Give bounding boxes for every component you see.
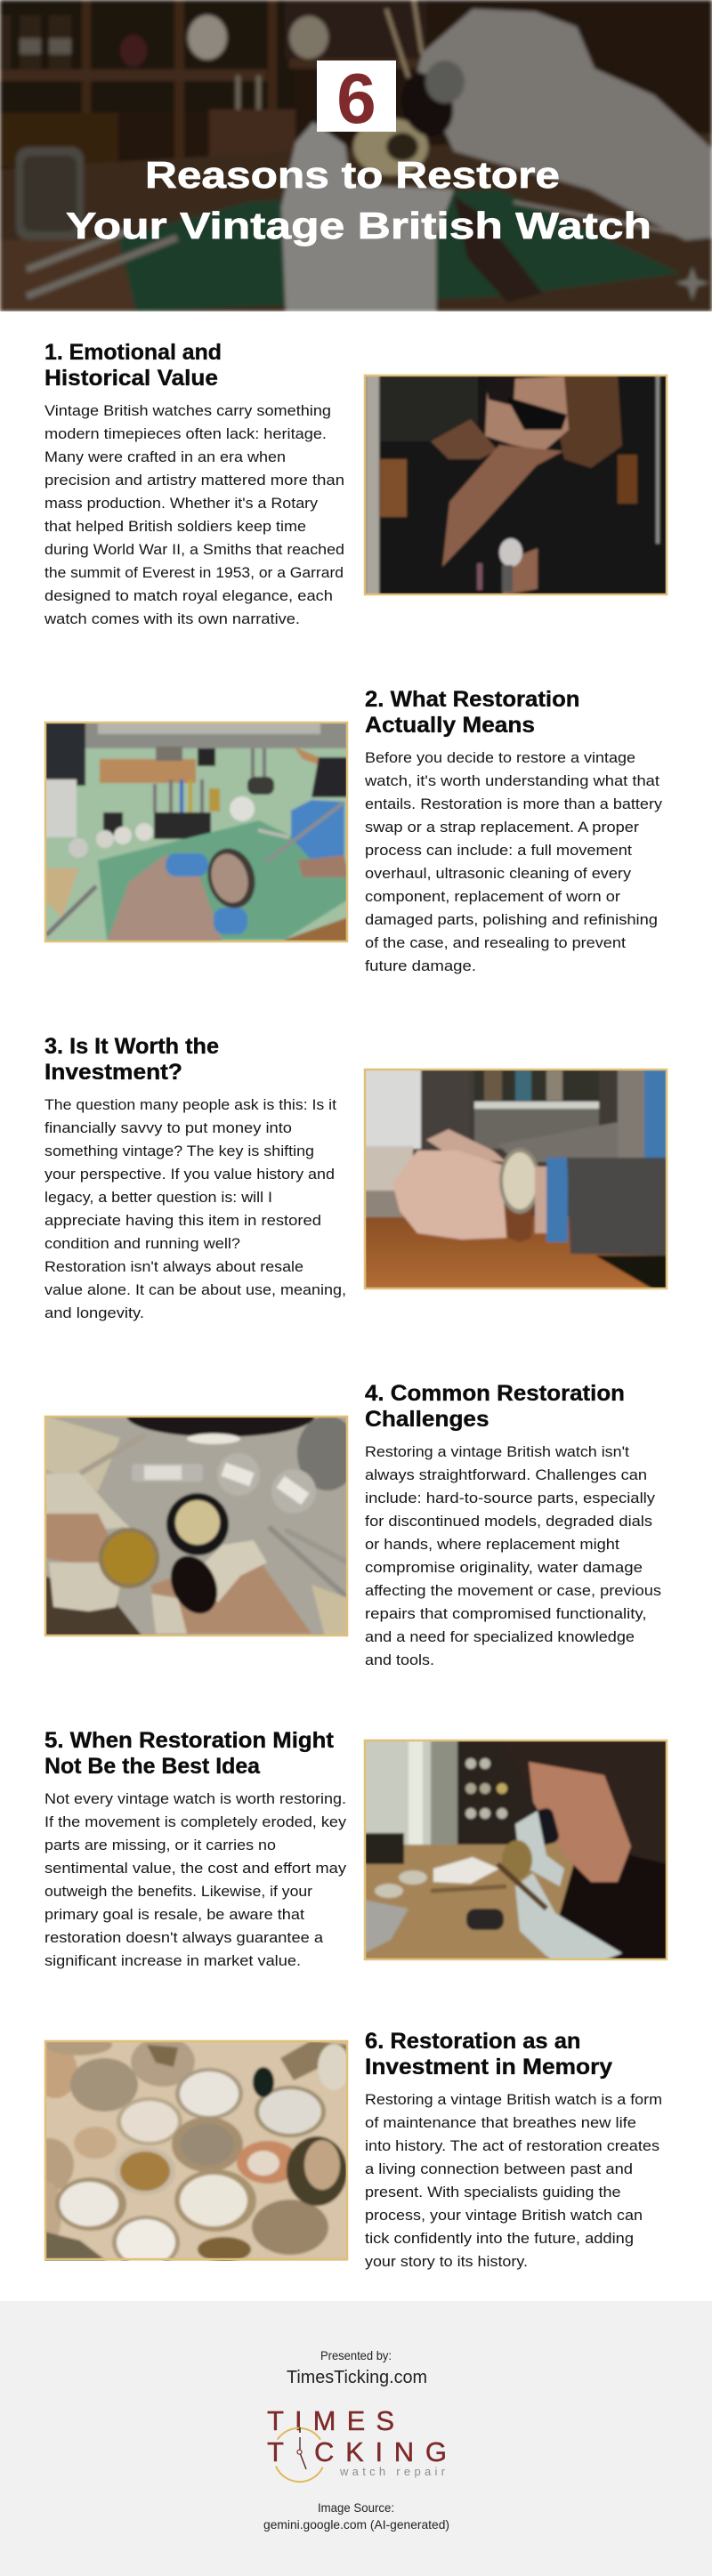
body text 3: The question many people ask is this: Is it [44, 1097, 336, 1113]
body text 2: process can include: a full movement [365, 843, 632, 859]
body text 4: include: hard-to-source parts, especially [365, 1490, 656, 1506]
image source [263, 2500, 449, 2532]
image source: Image Source: [318, 2500, 394, 2515]
body text 6: of maintenance that breathes new life [365, 2115, 636, 2131]
title: Reasons to Restore [145, 154, 560, 196]
body text 2: entails. Restoration is more than a battery [365, 796, 663, 812]
body text 4: affecting the movement or case, previous [365, 1583, 661, 1599]
body text 1: modern timepieces often lack: heritage. [44, 426, 327, 442]
body text 4 [365, 1444, 661, 1668]
image source: gemini.google.com (AI-generated) [263, 2517, 449, 2532]
body text 2: of the case, and resealing to prevent [365, 935, 626, 951]
body text 3: legacy, a better question is: will I [44, 1190, 272, 1206]
body text 1: precision and artistry mattered more than [44, 472, 344, 489]
body text 5: sentimental value, the cost and effort may [44, 1861, 347, 1877]
heading 1: Historical Value [44, 366, 218, 391]
body text 4: for discontinued models, degraded dials [365, 1514, 652, 1530]
body text 3: condition and running well? [44, 1236, 240, 1252]
body text 3: financially savvy to put money into [44, 1120, 292, 1136]
heading 2 [365, 687, 580, 738]
body text 6: your story to its history. [365, 2254, 528, 2270]
section 5: when restoration might not be the best idea [44, 1728, 668, 1969]
section 4: common restoration challenges [44, 1381, 661, 1668]
heading 2: Actually Means [365, 713, 535, 738]
photo frame [365, 1070, 667, 1288]
body text 1: watch comes with its own narrative. [44, 611, 300, 627]
heading 5: Not Be the Best Idea [44, 1754, 261, 1779]
body text 2: damaged parts, polishing and refinishing [365, 912, 658, 928]
footer panel [0, 2301, 712, 2576]
heading 6: 6. Restoration as an [365, 2029, 580, 2054]
heading 4: Challenges [365, 1407, 490, 1432]
title: Your Vintage British Watch [66, 205, 651, 246]
body text 1: during World War II, a Smiths that reached [44, 542, 344, 558]
body text 3: value alone. It can be about use, meaning, [44, 1282, 346, 1298]
body text 1 [44, 403, 344, 627]
body text 5: primary goal is resale, be aware that [44, 1907, 304, 1923]
hero photo: gloved hands restoring a watch [0, 0, 712, 311]
body text 6: Restoring a vintage British watch is a form [365, 2092, 662, 2108]
body text 3: your perspective. If you value history and [44, 1167, 335, 1183]
body text 4: Restoring a vintage British watch isn't [365, 1444, 629, 1460]
photo: gloved hands with vintage parts [46, 1417, 346, 1635]
body text 5: significant increase in market value. [44, 1953, 301, 1969]
body text 4: and a need for specialized knowledge [365, 1629, 635, 1645]
body text 5: restoration doesn't always guarantee a [44, 1930, 324, 1946]
body text 2: component, replacement of worn or [365, 889, 621, 905]
body text 4: always straightforward. Challenges can [365, 1467, 647, 1483]
logo: Times Ticking watch repair: watch repair [339, 2465, 446, 2478]
body text 6 [365, 2092, 662, 2270]
body text 6: tick confidently into the future, adding [365, 2231, 634, 2247]
header banner [0, 0, 712, 311]
body text 5: outweigh the benefits. Likewise, if your [44, 1884, 313, 1900]
body text 2: watch, it's worth understanding what that [364, 773, 659, 789]
body text 1: Many were crafted in an era when [44, 449, 286, 465]
number badge: 6 [336, 59, 376, 138]
photo frame [365, 375, 667, 594]
body text 5: parts are missing, or it carries no [44, 1837, 276, 1853]
body text 2: swap or a strap replacement. A proper [365, 820, 640, 836]
body text 2: future damage. [365, 958, 476, 974]
heading 1: 1. Emotional and [44, 340, 222, 365]
body text 5: Not every vintage watch is worth restoring. [44, 1791, 346, 1807]
body text 2: overhaul, ultrasonic cleaning of every [365, 866, 632, 882]
photo: watchmaker's green workbench [46, 723, 346, 941]
heading 1 [44, 340, 222, 391]
logo: Times Ticking watch repair [267, 2405, 447, 2482]
photo frame [45, 2041, 347, 2259]
logo: Times Ticking watch repair: T I CKING [267, 2436, 447, 2467]
body text 3: Restoration isn't always about resale [44, 1259, 303, 1275]
body text 6: process, your vintage British watch can [365, 2208, 643, 2224]
body text 4: and tools. [365, 1652, 434, 1668]
number badge [317, 59, 396, 138]
body text 5: If the movement is completely eroded, key [44, 1814, 347, 1830]
heading 5 [44, 1728, 335, 1779]
body text 3: something vintage? The key is shifting [44, 1143, 314, 1159]
title [66, 154, 651, 246]
body text 4: compromise originality, water damage [365, 1560, 643, 1576]
body text 3: and longevity. [44, 1305, 144, 1321]
photo: woman in sunglasses wearing a watch [366, 376, 666, 594]
body text 6: into history. The act of restoration creates [365, 2138, 659, 2154]
photo: wrist with a vintage watch on a wooden table [366, 1070, 666, 1288]
body text 1: mass production. Whether it's a Rotary [44, 496, 319, 512]
website name: TimesTicking.com [287, 2368, 427, 2387]
heading 4 [365, 1381, 625, 1432]
heading 3 [44, 1034, 219, 1085]
section 6: restoration as an investment in memory [24, 2029, 662, 2270]
body text 1: designed to match royal elegance, each [44, 588, 333, 604]
body text 2: Before you decide to restore a vintage [365, 750, 635, 766]
body text 5 [44, 1791, 347, 1969]
body text 3: appreciate having this item in restored [44, 1213, 321, 1229]
heading 6 [365, 2029, 612, 2079]
body text 3 [44, 1097, 346, 1321]
body text 2 [364, 750, 663, 974]
presented by: Presented by: [320, 2348, 392, 2362]
heading 5: 5. When Restoration Might [44, 1728, 335, 1753]
photo: watchmaker inspecting a watch with a loupe [366, 1741, 666, 1958]
body text 6: present. With specialists guiding the [365, 2184, 621, 2201]
section 3: is it worth the investment [44, 1034, 668, 1321]
heading 3: 3. Is It Worth the [44, 1034, 219, 1059]
body text 1: that helped British soldiers keep time [44, 519, 306, 535]
photo: assorted antique pocket watches [44, 2042, 348, 2261]
photo frame [45, 723, 347, 941]
logo: Times Ticking watch repair: TIMES [267, 2405, 394, 2436]
body text 4: or hands, where replacement might [365, 1537, 619, 1553]
section 2: what restoration actually means [44, 687, 663, 974]
heading 4: 4. Common Restoration [365, 1381, 625, 1406]
body text 4: repairs that compromised functionality, [365, 1606, 646, 1622]
photo frame [45, 1417, 347, 1635]
photo frame [365, 1740, 667, 1959]
body text 6: a living connection between past and [365, 2161, 633, 2177]
body text 1: Vintage British watches carry something [44, 403, 331, 419]
section 1: emotional and historical value [44, 340, 668, 627]
body text 1: the summit of Everest in 1953, or a Garrard [44, 565, 344, 581]
heading 6: Investment in Memory [365, 2055, 612, 2079]
heading 3: Investment? [44, 1060, 182, 1085]
heading 2: 2. What Restoration [365, 687, 580, 712]
